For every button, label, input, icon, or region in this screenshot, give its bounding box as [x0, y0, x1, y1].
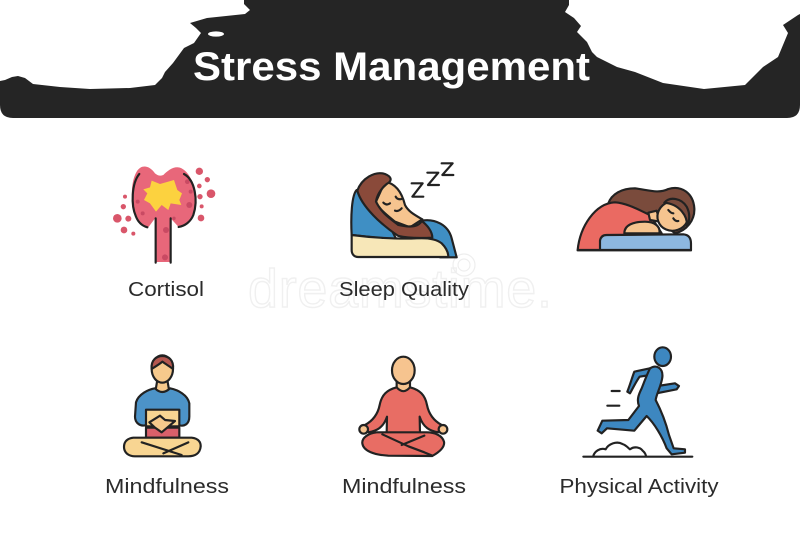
label: Mindfulness center: Mindfulness	[342, 476, 466, 498]
icon: person resting on pillow	[578, 188, 694, 250]
label: Cortisol: Cortisol	[128, 279, 204, 301]
title: Stress Management	[193, 45, 590, 89]
label: Sleep Quality: Sleep Quality	[339, 279, 469, 301]
icon: running figure	[583, 347, 692, 457]
header banner	[0, 0, 800, 118]
icon: seated man with crossed legs	[124, 355, 201, 456]
watermark: dreamstime.	[248, 259, 552, 319]
icon: thyroid gland	[113, 167, 215, 263]
icon: meditating figure	[359, 357, 447, 456]
label: Physical Activity: Physical Activity	[560, 476, 718, 498]
label: Mindfulness left: Mindfulness	[105, 476, 229, 498]
icon: person sleeping on wedge pillow	[351, 163, 457, 257]
